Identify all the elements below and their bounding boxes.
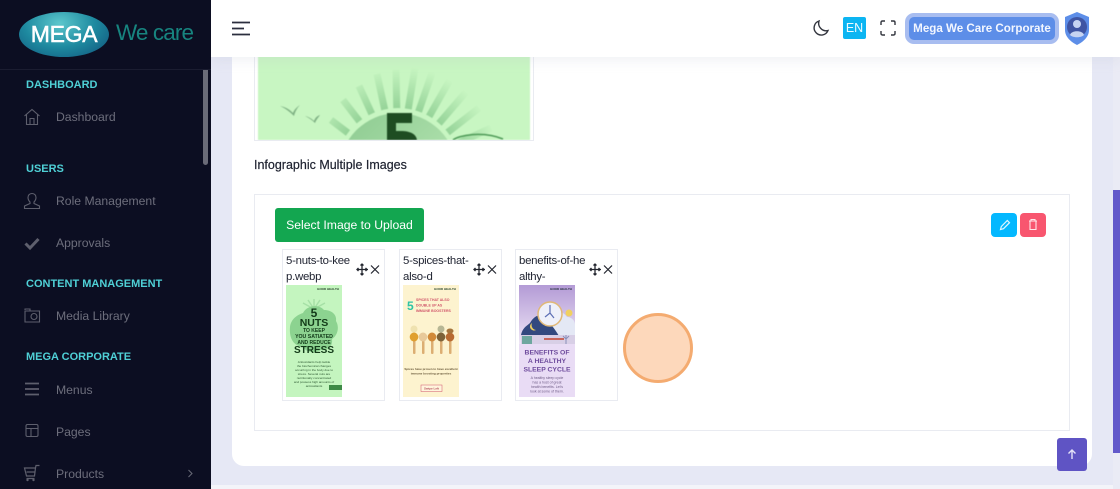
file name: benefits-of-he <box>519 255 585 267</box>
image: 5 spices infographic: DOUBLE UP AS <box>416 304 443 308</box>
image: 5 nuts infographic: Antioxidants help tackle <box>298 360 331 364</box>
label: infographic multiple images: Infographic Multiple Images <box>254 158 407 172</box>
menu item: pages: Pages <box>56 425 91 439</box>
image: 5 nuts infographic: YOU SATIATED <box>295 334 333 340</box>
image: 5 spices infographic: 5 <box>407 299 414 313</box>
icon: user shield <box>1065 12 1089 45</box>
image: sleep cycle infographic: health benefits. Let's <box>531 385 563 389</box>
image: sleep cycle infographic: A healthy sleep cycle <box>531 376 563 380</box>
image: 5 nuts infographic: TO KEEP <box>303 328 326 334</box>
image: 5 spices infographic: Swipe Left <box>424 386 439 390</box>
image: sleep cycle infographic: look at some of them. <box>530 390 564 394</box>
section: mega corporate: MEGA CORPORATE <box>26 351 131 363</box>
image: sleep cycle infographic: A HEALTHY <box>528 358 567 365</box>
icon: dark mode moon <box>813 20 830 36</box>
image: 5 nuts infographic: NUTS <box>300 317 328 329</box>
thumbnail: 5 nuts <box>282 249 385 401</box>
file name: 5-spices-that- <box>403 255 469 267</box>
button: select image to upload <box>275 208 424 242</box>
user name badge: Mega We Care Corporate <box>913 22 1051 35</box>
file name: althy- <box>519 271 545 283</box>
language button: EN <box>846 21 863 35</box>
logo oval <box>19 12 109 57</box>
image: 5 spices infographic: Spices have proven to have excellent <box>404 367 458 371</box>
image: 5 nuts infographic: nutritionally concentrated <box>297 376 331 380</box>
back to top button <box>1057 438 1087 471</box>
image: 5 spices infographic <box>403 285 459 397</box>
image: 5 nuts infographic: AND REDUCE <box>297 340 331 346</box>
section: content management: CONTENT MANAGEMENT <box>26 278 162 290</box>
image: 5 spices infographic: immune boosting properties <box>411 372 452 376</box>
section: users: USERS <box>26 163 64 175</box>
user name badge <box>905 13 1059 44</box>
icon: menu toggle <box>232 22 250 36</box>
image: 5 nuts infographic: and possess high amounts of <box>294 380 334 384</box>
image: 5 nuts infographic: the biochemical changes <box>297 364 331 368</box>
image: 5 nuts infographic: GOOD HEALTH <box>317 287 339 291</box>
icon: chevron <box>188 470 192 478</box>
button: select image to upload: Select Image to Upload <box>286 218 413 232</box>
image: 5 nuts infographic <box>286 285 342 397</box>
sidebar scrollbar <box>203 70 208 165</box>
file name <box>403 255 469 283</box>
scrollbar track <box>1113 56 1120 489</box>
icon: fullscreen <box>880 20 896 36</box>
image: 5 nuts infographic: 5 <box>311 306 318 320</box>
language button <box>843 17 866 39</box>
file name: p.webp <box>286 271 321 283</box>
section: dashboard: DASHBOARD <box>26 79 98 91</box>
image: sleep cycle infographic: SLEEP CYCLE <box>523 366 571 374</box>
menu item: products: Products <box>56 467 104 481</box>
icon: user <box>24 193 40 209</box>
menu item: dashboard: Dashboard <box>56 110 116 124</box>
image: sleep cycle infographic: GOOD HEALTH <box>550 287 572 291</box>
image: 5 nuts infographic: occurring in the body due to <box>295 368 333 372</box>
image: 5 spices infographic: IMMUNE BOOSTERS <box>416 309 451 313</box>
tools: move and remove <box>473 263 496 276</box>
menu item: approvals: Approvals <box>56 236 110 250</box>
image: 5 spices infographic: GOOD HEALTH <box>434 287 456 291</box>
click highlight circle <box>623 313 693 383</box>
file name: 5-nuts-to-kee <box>286 255 350 267</box>
icon: menus <box>25 382 39 396</box>
file name <box>286 255 350 283</box>
icon: home <box>24 108 40 125</box>
thumbnail: benefits of healthy sleep <box>515 249 618 401</box>
image: sleep cycle infographic <box>519 285 575 397</box>
image: sleep cycle infographic: has a host of great <box>532 380 562 384</box>
upload panel <box>254 194 1070 431</box>
tools: move and remove <box>589 263 612 276</box>
button: delete <box>1020 213 1046 237</box>
icon: pages <box>26 424 38 437</box>
sidebar <box>0 0 211 489</box>
file name <box>519 255 585 283</box>
menu item: role management: Role Management <box>56 194 156 208</box>
button: edit <box>991 213 1017 237</box>
image: 5 nuts infographic: STRESS <box>294 345 334 356</box>
image: 5 nuts infographic: stress. Several nuts are <box>298 372 331 376</box>
content card <box>232 40 1092 466</box>
icon: media camera <box>24 308 40 322</box>
menu item: menus: Menus <box>56 383 93 397</box>
logo <box>0 0 211 70</box>
image: sleep cycle infographic: BENEFITS OF <box>525 350 569 356</box>
image: 5 spices infographic: SPICES THAT ALSO <box>416 298 450 302</box>
tools: move and remove <box>356 263 380 276</box>
image: 5 nuts infographic: antioxidants <box>306 384 323 388</box>
logo wordmark: We care <box>116 20 193 45</box>
thumbnail: 5 spices <box>399 249 502 401</box>
top header bar <box>211 0 1120 57</box>
single image preview <box>254 50 534 141</box>
icon: check <box>24 238 40 250</box>
scrollbar thumb <box>1113 190 1120 453</box>
logo oval: MEGA <box>31 21 97 47</box>
file name: also-d <box>403 271 433 283</box>
menu item: media library: Media Library <box>56 309 130 323</box>
icon: cart <box>24 464 40 482</box>
